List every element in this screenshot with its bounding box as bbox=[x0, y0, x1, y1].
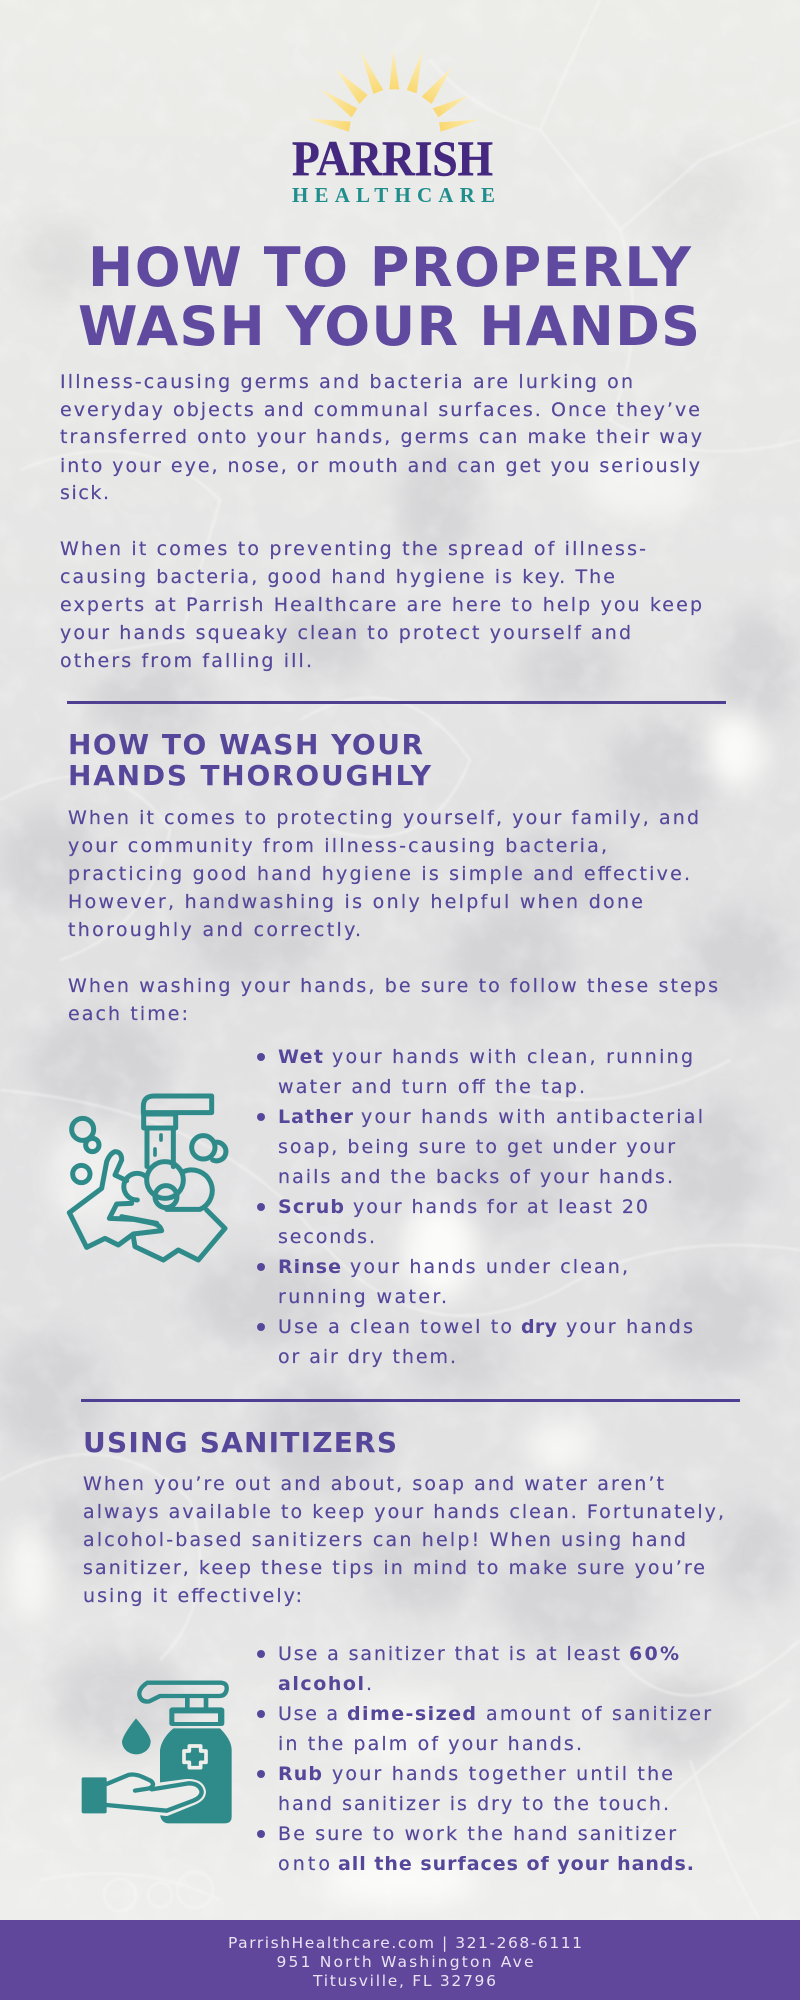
step: lather: Lather bbox=[278, 1106, 354, 1128]
tip: rub hands: Rub bbox=[278, 1763, 322, 1785]
tip: dime-sized amount: amount of sanitizer bbox=[486, 1703, 711, 1725]
logo wordmark: Parrish: PARRISH bbox=[292, 130, 493, 186]
tip: rub hands bbox=[257, 1763, 673, 1815]
icon part: hand palm bbox=[107, 1775, 202, 1812]
text block: intro: experts at Parrish Healthcare are here to help you keep bbox=[60, 594, 702, 616]
text block: washing introduction: thoroughly and correctly. bbox=[68, 919, 361, 941]
tip: rub hands: your hands together until the bbox=[332, 1763, 673, 1785]
logo wordmark: Healthcare: HEALTHCARE bbox=[292, 183, 495, 207]
step: wet: Wet bbox=[278, 1046, 323, 1068]
text block: washing introduction bbox=[68, 807, 718, 1025]
text block: washing introduction: When it comes to protecting yourself, your family, and bbox=[68, 807, 699, 829]
text block: intro: Illness-causing germs and bacteria are lurking on bbox=[60, 371, 633, 393]
text block: intro: causing bacteria, good hand hygiene is key. The bbox=[60, 566, 615, 588]
text block: washing introduction: your community from illness-causing bacteria, bbox=[68, 835, 607, 857]
icon: hand washing under faucet bbox=[69, 1096, 226, 1260]
step: lather: nails and the backs of your hands. bbox=[278, 1166, 673, 1188]
text block: sanitizer introduction: sanitizer, keep these tips in mind to make sure you’re bbox=[83, 1557, 705, 1579]
icon: sun rays bbox=[307, 49, 480, 132]
text block: washing introduction: practicing good hand hygiene is simple and effective. bbox=[68, 863, 690, 885]
footer: 951 North Washington Ave bbox=[276, 1953, 534, 1971]
text block: intro: When it comes to preventing the spread of illness- bbox=[60, 538, 646, 560]
step: scrub: seconds. bbox=[278, 1226, 375, 1248]
step: lather: your hands with antibacterial bbox=[361, 1106, 703, 1128]
text block: sanitizer introduction: alcohol-based sanitizers can help! When using hand bbox=[83, 1529, 686, 1551]
text block: intro: into your eye, nose, or mouth and can get you seriously bbox=[60, 455, 700, 477]
step: dry: Use a clean towel to bbox=[278, 1316, 512, 1338]
tip: dime-sized amount: Use a bbox=[278, 1703, 338, 1725]
text block: washing introduction: When washing your hands, be sure to follow these steps bbox=[68, 975, 718, 997]
step: wet: your hands with clean, running bbox=[332, 1046, 693, 1068]
list: sanitizer tips bbox=[257, 1643, 711, 1875]
text block: intro: sick. bbox=[60, 482, 109, 504]
icon part: bottle cap bbox=[169, 1707, 224, 1726]
step: dry bbox=[257, 1316, 693, 1368]
step: rinse bbox=[257, 1256, 628, 1308]
icon part: pump stem bbox=[187, 1696, 206, 1708]
text block: washing introduction: each time: bbox=[68, 1003, 188, 1025]
icon part: sleeve bbox=[82, 1777, 107, 1813]
text block: sanitizer introduction: When you’re out and about, soap and water aren’t bbox=[83, 1473, 664, 1495]
tip: rub hands: hand sanitizer is dry to the touch. bbox=[278, 1793, 669, 1815]
step: scrub: Scrub bbox=[278, 1196, 344, 1218]
tip: at least 60% alcohol bbox=[257, 1643, 679, 1695]
icon part: pump head bbox=[139, 1683, 227, 1702]
step: dry: dry bbox=[521, 1316, 558, 1338]
text block: washing introduction: However, handwashing is only helpful when done bbox=[68, 891, 643, 913]
tip: all surfaces bbox=[257, 1823, 694, 1875]
title bbox=[78, 236, 700, 358]
icon: sanitizer bottle and hand bbox=[82, 1683, 232, 1823]
heading: how to wash your hands thoroughly bbox=[68, 728, 432, 792]
icon part: droplet bbox=[122, 1718, 151, 1754]
step: wet bbox=[257, 1046, 693, 1098]
text block: intro: others from falling ill. bbox=[60, 650, 312, 672]
footer bbox=[0, 1920, 800, 2000]
icon part: bottle body bbox=[160, 1728, 232, 1823]
step: lather: soap, being sure to get under your bbox=[278, 1136, 675, 1158]
step: scrub bbox=[257, 1196, 648, 1248]
heading: how to wash your hands thoroughly: HANDS THOROUGHLY bbox=[68, 759, 432, 792]
tip: at least 60% alcohol: Use a sanitizer that is at least bbox=[278, 1643, 620, 1665]
footer: Titusville, FL 32796 bbox=[312, 1972, 496, 1990]
tip: all surfaces: onto bbox=[278, 1853, 330, 1875]
step: scrub: your hands for at least 20 bbox=[353, 1196, 648, 1218]
step: lather bbox=[257, 1106, 703, 1188]
icon part: hand outline bbox=[107, 1775, 202, 1811]
tip: all surfaces: Be sure to work the hand sanitizer bbox=[278, 1823, 676, 1845]
heading: how to wash your hands thoroughly: HOW TO WASH YOUR bbox=[68, 728, 423, 761]
tip: at least 60% alcohol: 60% bbox=[629, 1643, 679, 1665]
step: dry: or air dry them. bbox=[278, 1346, 456, 1368]
tip: dime-sized amount: dime-sized bbox=[347, 1703, 476, 1725]
step: wet: water and turn off the tap. bbox=[278, 1076, 585, 1098]
tip: at least 60% alcohol: alcohol bbox=[278, 1673, 364, 1695]
text block: intro: your hands squeaky clean to protect yourself and bbox=[60, 622, 631, 644]
title: HOW TO PROPERLY bbox=[88, 236, 692, 299]
text block: intro bbox=[60, 371, 702, 672]
text block: sanitizer introduction: using it effectively: bbox=[83, 1585, 302, 1607]
text block: intro: everyday objects and communal surfaces. Once they’ve bbox=[60, 399, 700, 421]
title: WASH YOUR HANDS bbox=[78, 295, 700, 358]
logo: Parrish Healthcare bbox=[292, 49, 495, 207]
step: rinse: Rinse bbox=[278, 1256, 341, 1278]
step: rinse: your hands under clean, bbox=[350, 1256, 628, 1278]
step: dry: your hands bbox=[566, 1316, 693, 1338]
list: hand washing steps bbox=[257, 1046, 703, 1368]
tip: dime-sized amount: in the palm of your hands. bbox=[278, 1733, 582, 1755]
tip: all surfaces: all the surfaces of your hands. bbox=[338, 1853, 694, 1875]
tip: at least 60% alcohol: . bbox=[366, 1673, 372, 1695]
heading: using sanitizers: USING SANITIZERS bbox=[83, 1426, 397, 1459]
text block: intro: transferred onto your hands, germs can make their way bbox=[60, 426, 702, 448]
text block: sanitizer introduction bbox=[83, 1473, 724, 1607]
tip: dime-sized amount bbox=[257, 1703, 711, 1755]
footer: ParrishHealthcare.com | 321-268-6111 bbox=[228, 1934, 582, 1952]
text block: sanitizer introduction: always available to keep your hands clean. Fortunately, bbox=[83, 1501, 724, 1523]
icon part: medical cross bbox=[184, 1746, 206, 1768]
step: rinse: running water. bbox=[278, 1286, 447, 1308]
